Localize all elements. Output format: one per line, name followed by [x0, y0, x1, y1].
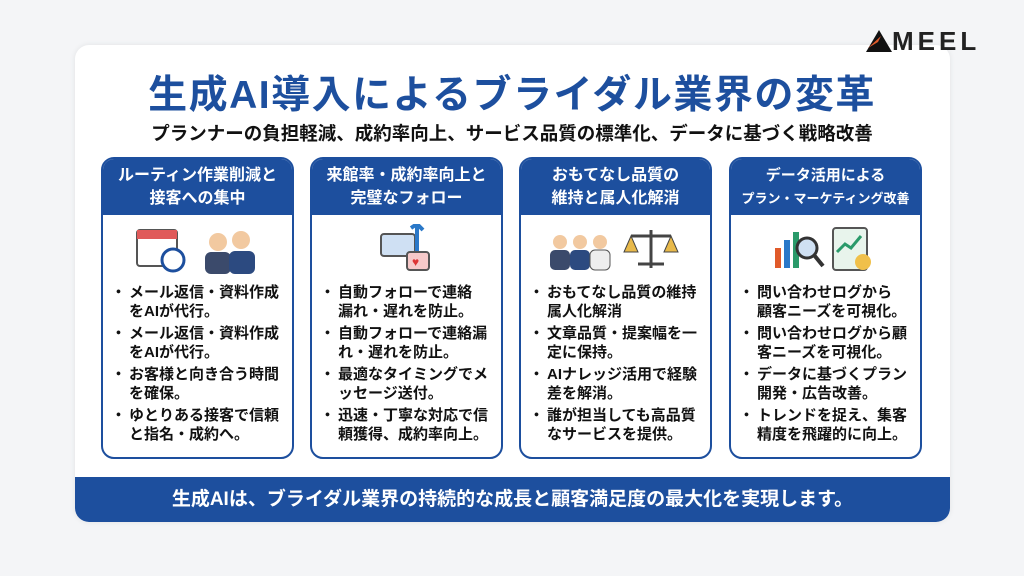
- panel: follow-up: 自動フォローで連絡漏: [338, 325, 487, 342]
- panel: routine: [101, 157, 294, 459]
- panel: follow-up: [310, 157, 503, 459]
- panel: data: 問い合わせログから顧: [757, 325, 907, 342]
- panel: data: 精度を飛躍的に向上。: [757, 426, 907, 443]
- panel: data: データ活用による: [766, 167, 885, 184]
- panel: routine: メール返信・資料作成: [129, 284, 279, 301]
- panel: hospitality: なサービスを提供。: [547, 426, 682, 443]
- panel: data: 開発・広告改善。: [757, 385, 877, 402]
- panel: data: トレンドを捉え、集客: [757, 407, 907, 424]
- panel: hospitality: 属人化解消: [547, 303, 622, 320]
- panel: follow-up: ッセージ送付。: [338, 385, 443, 402]
- panel: data: [729, 157, 922, 459]
- icon: chat: [380, 224, 430, 271]
- panel: follow-up: 完璧なフォロー: [350, 190, 462, 207]
- logo: MEEL: [892, 26, 980, 56]
- icon: chart and magnifier: [775, 227, 871, 271]
- panel: hospitality: 誰が担当しても高品質: [547, 407, 696, 424]
- panel: routine: ルーティン作業削減と: [118, 167, 277, 184]
- panel: hospitality: 定に保持。: [547, 344, 622, 361]
- panel: follow-up: 来館率・成約率向上と: [326, 167, 486, 184]
- panel: follow-up: れ・遅れを防止。: [338, 344, 458, 361]
- panel: data: 顧客ニーズを可視化。: [757, 303, 906, 320]
- panel: follow-up: 漏れ・遅れを防止。: [338, 303, 473, 320]
- subtitle: プランナーの負担軽減、成約率向上、サービス品質の標準化、データに基づく戦略改善: [151, 123, 873, 144]
- panel: hospitality: おもてなし品質の: [552, 167, 679, 184]
- panel: routine: 接客への集中: [149, 190, 246, 207]
- panel: follow-up: 迅速・丁寧な対応で信: [338, 407, 488, 424]
- panel: hospitality: 文章品質・提案幅を一: [547, 325, 697, 342]
- panel: follow-up: 最適なタイミングでメ: [338, 366, 488, 383]
- panel: hospitality: おもてなし品質の維持: [547, 284, 696, 301]
- panel: hospitality: [519, 157, 712, 459]
- panel: routine: メール返信・資料作成: [129, 325, 279, 342]
- panel: follow-up: 頼獲得、成約率向上。: [338, 426, 488, 443]
- panel: routine: をAIが代行。: [129, 344, 219, 361]
- panel: data: 問い合わせログから: [757, 284, 892, 301]
- panel: routine: と指名・成約へ。: [129, 426, 249, 443]
- panel: routine: を確保。: [129, 385, 189, 402]
- panel: data: 客ニーズを可視化。: [757, 344, 891, 361]
- panel: hospitality: 維持と属人化解消: [551, 190, 680, 207]
- title: 生成AI導入によるブライダル業界の変革: [148, 74, 876, 117]
- icon: people and scale: [550, 230, 679, 270]
- panel: routine: ゆとりある接客で信頼: [129, 407, 279, 424]
- banner: conclusion: [75, 477, 950, 522]
- panel: follow-up: 自動フォローで連絡: [338, 284, 472, 301]
- icon: chat: ♥: [412, 255, 419, 269]
- panel: routine: をAIが代行。: [129, 303, 219, 320]
- banner: conclusion: 生成AIは、ブライダル業界の持続的な成長と顧客満足度の最大化を実現します。: [172, 489, 853, 510]
- panel: data: プラン・マーケティング改善: [742, 191, 909, 206]
- icon: calendar and staff: [136, 229, 255, 274]
- panel: data: データに基づくプラン: [757, 366, 907, 383]
- panel: hospitality: 差を解消。: [547, 385, 622, 402]
- main card: [75, 45, 950, 522]
- panel: routine: お客様と向き合う時間: [129, 366, 279, 383]
- panel: hospitality: AIナレッジ活用で経験: [547, 366, 697, 383]
